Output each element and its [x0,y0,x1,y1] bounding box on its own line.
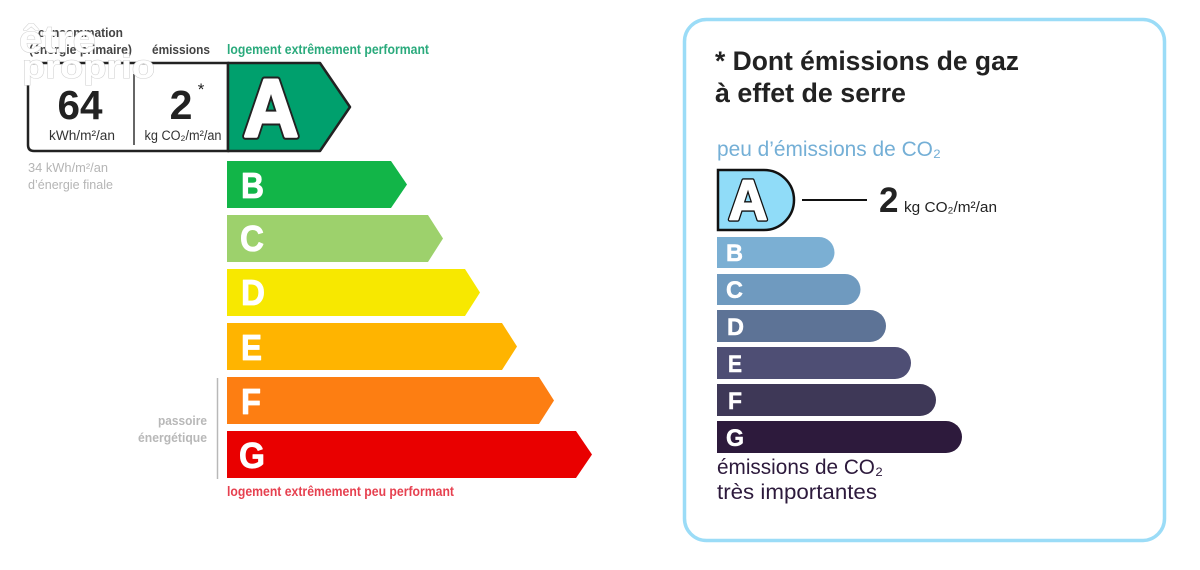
column heading: consumption: consommation [38,25,123,40]
value: consumption [49,82,115,143]
final energy note: 34 kWh/m²/an [28,160,108,175]
passoire label: passoire [158,413,207,428]
top label: very efficient: logement extrêmement performant [227,42,429,57]
rating bar A: A [244,64,298,154]
column heading: consumption: (énergie primaire) [29,42,132,57]
rating bar B: B [241,165,264,206]
connector line [802,199,867,201]
value: emissions: 2 [170,82,192,128]
rating bar B: B [726,240,743,267]
column heading: consumption [29,25,132,57]
bottom label: high emissions: très importantes [717,481,877,504]
rating bar A: A [244,64,298,154]
top label: low emissions: peu d’émissions de CO₂ [717,138,941,161]
rating bar A [718,168,794,232]
rating bar F: F [728,388,742,415]
rating bar A [228,63,350,154]
final energy note: d’énergie finale [28,177,113,192]
rating bar B [717,237,834,268]
panel heading: à effet de serre [715,78,906,108]
rating bar C: C [240,218,264,259]
panel: greenhouse gas emissions [684,20,1164,540]
rating bar A: A [728,168,768,232]
watermark: être [19,19,96,61]
passoire label [138,413,207,445]
rating bar D: D [727,314,744,341]
rating bar G: G [239,435,265,476]
value box [28,63,228,151]
bottom label: high emissions: émissions de CO₂ [717,456,883,479]
emissions value [879,181,997,220]
rating bar C [717,274,860,305]
panel: energy label [28,25,592,499]
bottom label: very inefficient: logement extrêmement peu performant [227,484,454,499]
rating bar F: F [241,381,261,422]
rating bar E [717,347,911,379]
rating bar G [717,421,962,453]
rating bar A: A [728,168,768,232]
panel border [684,20,1164,540]
rating bar G [227,431,592,478]
rating bar F [227,377,554,424]
rating bar C [227,215,443,262]
passoire label: énergétique [138,430,207,445]
emissions value: 2 [879,181,898,220]
value: emissions [144,80,222,143]
passoire bracket [216,378,218,479]
column heading: emissions: émissions [152,42,210,57]
panel heading: * Dont émissions de gaz [715,46,1019,76]
rating bar D [717,310,886,342]
value: emissions: kg CO₂/m²/an [144,128,222,143]
panel heading [715,46,1019,108]
rating bar B [227,161,407,208]
rating bar E: E [728,351,742,378]
rating bar E: E [241,327,262,368]
rating bar G: G [726,425,744,452]
watermark [19,19,155,85]
rating bar F [717,384,936,416]
rating bar D: D [241,272,265,313]
value: consumption: kWh/m²/an [49,128,115,143]
watermark: proprio [22,48,155,85]
rating bar C: C [726,277,743,304]
rating bar D [227,269,480,316]
value: emissions: * [198,80,205,99]
emissions value: kg CO₂/m²/an [904,199,997,216]
rating bar E [227,323,517,370]
bottom label: high emissions [717,456,883,504]
value: consumption: 64 [58,82,103,128]
final energy note [28,160,113,192]
